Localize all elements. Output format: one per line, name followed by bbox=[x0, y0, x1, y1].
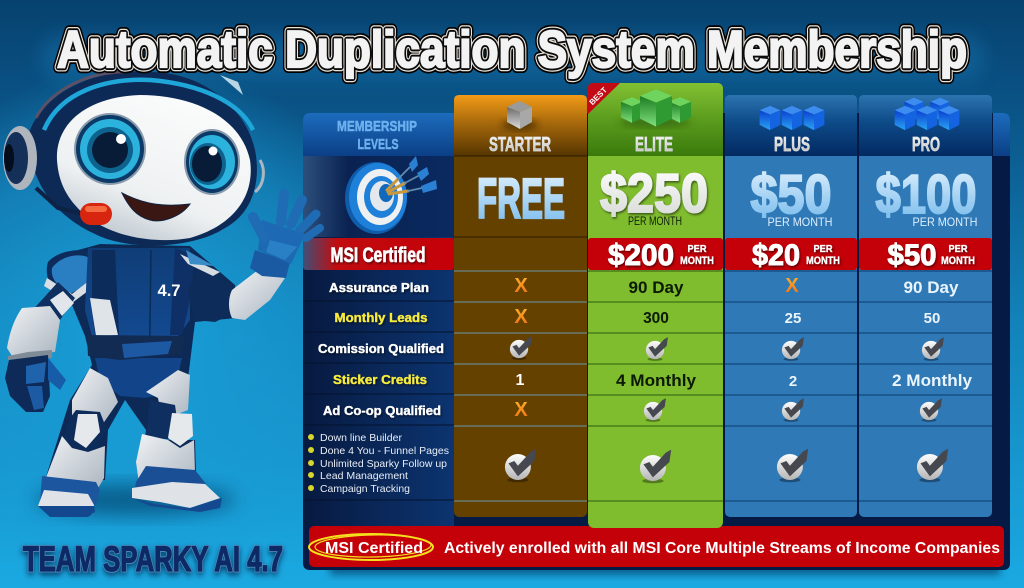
team name: TEAM SPARKY AI 4.7 bbox=[23, 540, 283, 579]
robot left eye bbox=[74, 113, 146, 185]
starter values: X bbox=[514, 306, 528, 328]
msi certified prices: PER bbox=[948, 243, 968, 255]
pro values bbox=[892, 279, 973, 482]
plus heading: PLUS bbox=[774, 134, 810, 156]
msi certified oval bbox=[309, 534, 433, 560]
robot torso bbox=[85, 248, 220, 398]
starter values bbox=[505, 275, 536, 482]
feature bullet list: Done 4 You - Funnel Pages bbox=[320, 445, 449, 457]
msi certified prices: MONTH bbox=[941, 255, 975, 267]
feature labels: Sticker Credits bbox=[333, 372, 427, 387]
msi certified row label: MSI Certified bbox=[330, 244, 426, 267]
feature labels: Ad Co-op Qualified bbox=[323, 403, 441, 418]
plus price: $50 bbox=[750, 163, 832, 225]
elite price: $250 bbox=[600, 162, 708, 224]
starter values: X bbox=[514, 275, 528, 297]
footer banner bbox=[309, 526, 1004, 567]
msi certified prices: MONTH bbox=[680, 255, 714, 267]
panel: pro column bbox=[859, 95, 992, 517]
icon: target with darts bbox=[345, 156, 437, 234]
panel shadow bbox=[330, 555, 1000, 575]
pro heading: PRO bbox=[912, 134, 940, 156]
elite price: PER MONTH bbox=[628, 214, 682, 228]
headset microphone bbox=[36, 188, 112, 225]
plus price: PER MONTH bbox=[768, 215, 832, 229]
pro values: 2 Monthly bbox=[892, 372, 973, 390]
icon: silver cube bbox=[502, 101, 538, 130]
icon: green cubes bbox=[619, 89, 691, 127]
robot mouth bbox=[122, 193, 190, 221]
msi certified prices: $200 bbox=[608, 239, 674, 272]
heading: membership levels: LEVELS bbox=[358, 136, 398, 153]
best ribbon bbox=[588, 83, 620, 114]
starter price: FREE bbox=[477, 167, 565, 231]
msi certified prices: PER bbox=[688, 243, 707, 255]
starter values: X bbox=[514, 399, 528, 421]
feature bullet list: Lead Management bbox=[320, 470, 408, 482]
pro price: $100 bbox=[876, 163, 976, 225]
starter heading: STARTER bbox=[489, 134, 551, 156]
plus values: X bbox=[785, 275, 799, 297]
plus values: 25 bbox=[785, 310, 801, 327]
robot right eye bbox=[184, 129, 240, 195]
feature bullet list: Down line Builder bbox=[320, 432, 402, 444]
feature bullet list bbox=[308, 432, 449, 495]
feature labels bbox=[318, 280, 444, 418]
msi certified prices: PER bbox=[814, 243, 833, 255]
plus values bbox=[777, 275, 808, 482]
msi certified prices: MONTH bbox=[806, 255, 840, 267]
footer statement: Actively enrolled with all MSI Core Multiple Streams of Income Companies bbox=[444, 540, 1000, 557]
heading: membership levels: MEMBERSHIP bbox=[337, 118, 417, 135]
panel: plus column bbox=[725, 95, 857, 517]
team name: TEAM SPARKY AI 4.7 bbox=[23, 540, 283, 579]
elite values: 300 bbox=[643, 310, 669, 327]
version badge: 4.7 bbox=[158, 281, 180, 300]
msi certified prices: $50 bbox=[888, 239, 936, 272]
robot legs and boots bbox=[38, 368, 222, 517]
pro values: 50 bbox=[924, 310, 940, 327]
pro price: PER MONTH bbox=[912, 215, 978, 229]
elite values: 4 Monthly bbox=[616, 372, 697, 390]
msi certified oval: MSI Certified bbox=[325, 540, 423, 557]
robot left arm bbox=[5, 250, 106, 412]
icon: blue cube stack bbox=[895, 98, 959, 130]
heading: membership levels bbox=[337, 118, 417, 153]
elite heading: ELITE bbox=[635, 134, 673, 156]
panel: elite column bbox=[588, 83, 723, 528]
plus values: 2 bbox=[789, 373, 797, 390]
msi certified prices bbox=[454, 238, 992, 272]
msi certified row label bbox=[303, 238, 454, 270]
robot head bbox=[3, 71, 263, 245]
starter values: 1 bbox=[516, 372, 525, 389]
feature labels: Comission Qualified bbox=[318, 341, 444, 356]
msi certified prices: $20 bbox=[752, 239, 800, 272]
feature labels: Assurance Plan bbox=[329, 280, 429, 295]
icon: three blue cubes bbox=[760, 106, 824, 130]
pricing panel bbox=[303, 113, 1010, 570]
elite values: 90 Day bbox=[628, 279, 684, 297]
feature labels: Monthly Leads bbox=[334, 310, 428, 325]
elite values bbox=[616, 279, 697, 483]
feature bullet list: Campaign Tracking bbox=[320, 483, 410, 495]
best ribbon: BEST bbox=[588, 85, 609, 107]
robot mascot bbox=[3, 71, 320, 517]
robot body silhouette bbox=[45, 244, 236, 482]
pro values: 90 Day bbox=[904, 279, 959, 297]
robot right arm and waving hand bbox=[188, 194, 320, 322]
panel: starter column bbox=[454, 95, 587, 517]
feature bullet list: Unlimited Sparky Follow up bbox=[320, 458, 447, 470]
